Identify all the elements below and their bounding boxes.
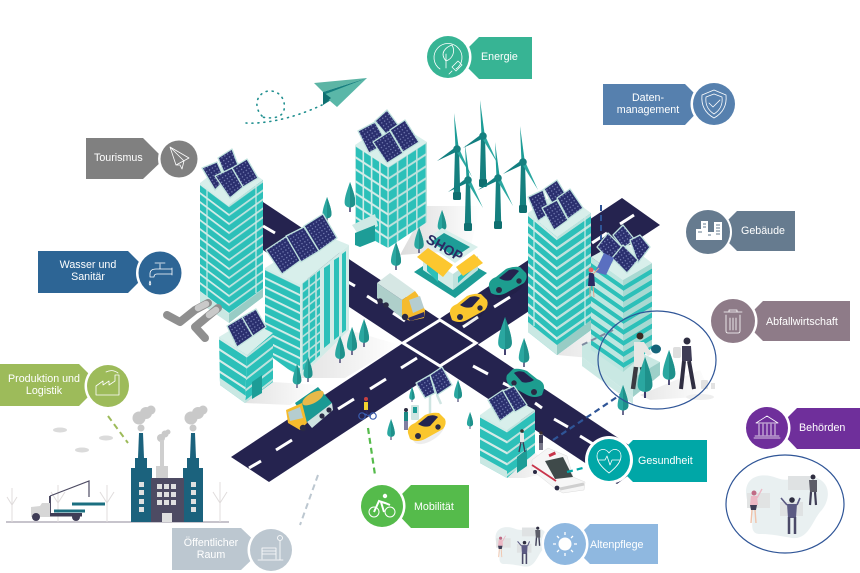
callout illustration: Altenpflege team (496, 527, 547, 567)
label: Datenmanagement: management (617, 104, 679, 116)
truck: grey box with yellow cab (377, 273, 425, 321)
label: Energie (424, 34, 532, 80)
icon: heart pulse (597, 449, 621, 473)
road markings (249, 215, 634, 468)
trees by shop (391, 227, 424, 270)
dashed line: blue at top of building (600, 205, 602, 240)
trees behind buildings (322, 182, 446, 234)
dashed line: blue to Gesundheit (553, 395, 620, 440)
label: Abfallwirtschaft (708, 296, 850, 346)
label: Produktion und Logistik: Produktion und (8, 373, 80, 385)
label: Gesundheit (585, 436, 707, 484)
icon: leaf and plug (434, 44, 462, 74)
label: Produktion und Logistik (0, 362, 132, 410)
label: Mobilität (358, 482, 469, 530)
label: Öffentlicher Raum (172, 526, 294, 573)
wind turbines (437, 100, 538, 231)
label: Altenpflege: Altenpflege (590, 539, 644, 551)
building: tall tower left (200, 149, 263, 323)
factory scene (6, 406, 229, 522)
label: Behörden (744, 404, 860, 452)
car: green lower right (503, 369, 544, 405)
cars on the upper right road (450, 267, 530, 330)
label: Öffentlicher Raum: Öffentlicher (184, 537, 239, 549)
label: Mobilität: Mobilität (414, 501, 454, 513)
shop: SHOP (424, 231, 466, 264)
icon: paper plane outline (170, 147, 189, 169)
paper plane (314, 78, 367, 107)
icon: cyclist (369, 494, 395, 517)
car: yellow at charger (408, 413, 449, 449)
icon: bin (724, 310, 742, 333)
label: Öffentlicher Raum: Raum (197, 549, 225, 561)
person with EU flag (588, 253, 614, 297)
label: Produktion und Logistik: Logistik (26, 385, 63, 397)
icon: bench and lamp (258, 536, 283, 560)
label: Abfallwirtschaft: Abfallwirtschaft (766, 316, 838, 328)
label: Wasser und Sanitär (38, 249, 184, 297)
trees near intersection (387, 317, 529, 440)
label: Wasser und Sanitär: Sanitär (71, 271, 105, 283)
label: Altenpflege (542, 520, 658, 568)
pipes (167, 303, 218, 338)
trees in front of mid-left building (293, 319, 369, 388)
dashed line: grey to Öffentlicher Raum (300, 475, 318, 525)
label: Wasser und Sanitär: Wasser und (60, 259, 116, 271)
building: centre-top with window grid (352, 110, 427, 248)
label: Gebäude (684, 208, 795, 256)
label: Tourismus (86, 138, 200, 180)
callout illustration: people handing waste (598, 311, 716, 415)
icon: shield (702, 90, 726, 118)
icon: buildings (696, 221, 722, 240)
label: Behörden: Behörden (799, 422, 845, 434)
building: right with podium (582, 225, 660, 404)
building: front right (480, 386, 535, 478)
crane truck (31, 481, 105, 521)
people beside front right building (519, 429, 543, 452)
icon: institution (754, 416, 780, 438)
icon: sun (553, 532, 577, 556)
truck: dump truck (286, 387, 333, 431)
label: Energie: Energie (481, 51, 518, 63)
dashed line: grey on building (582, 330, 613, 345)
icon: factory (96, 371, 119, 395)
label: Gebäude: Gebäude (741, 225, 785, 237)
dashed line: olive to factory (108, 416, 128, 443)
cyclist (359, 397, 376, 419)
label: Tourismus: Tourismus (94, 152, 143, 164)
building: small front-left (219, 309, 273, 403)
shop (414, 228, 487, 298)
label: Datenmanagement: Daten- (632, 92, 664, 104)
label: Datenmanagement (603, 80, 738, 128)
label: Gesundheit: Gesundheit (638, 455, 693, 467)
plane dotted trail (246, 91, 322, 123)
dashed line: teal to Gesundheit (567, 467, 587, 472)
solar charging station (404, 367, 452, 430)
building: mid-left with vertical stripes (265, 214, 349, 378)
road: diagonal lower-left to upper-right (231, 198, 660, 482)
callout illustration: Behörden team in ellipse (726, 455, 844, 553)
dashed line: green to Mobilität (368, 428, 375, 475)
road: diagonal upper-left to lower-right (263, 202, 650, 484)
building: tall right (528, 180, 591, 355)
icon: water tap (149, 263, 172, 285)
ambulance (532, 448, 585, 493)
ground shadows (245, 206, 712, 478)
